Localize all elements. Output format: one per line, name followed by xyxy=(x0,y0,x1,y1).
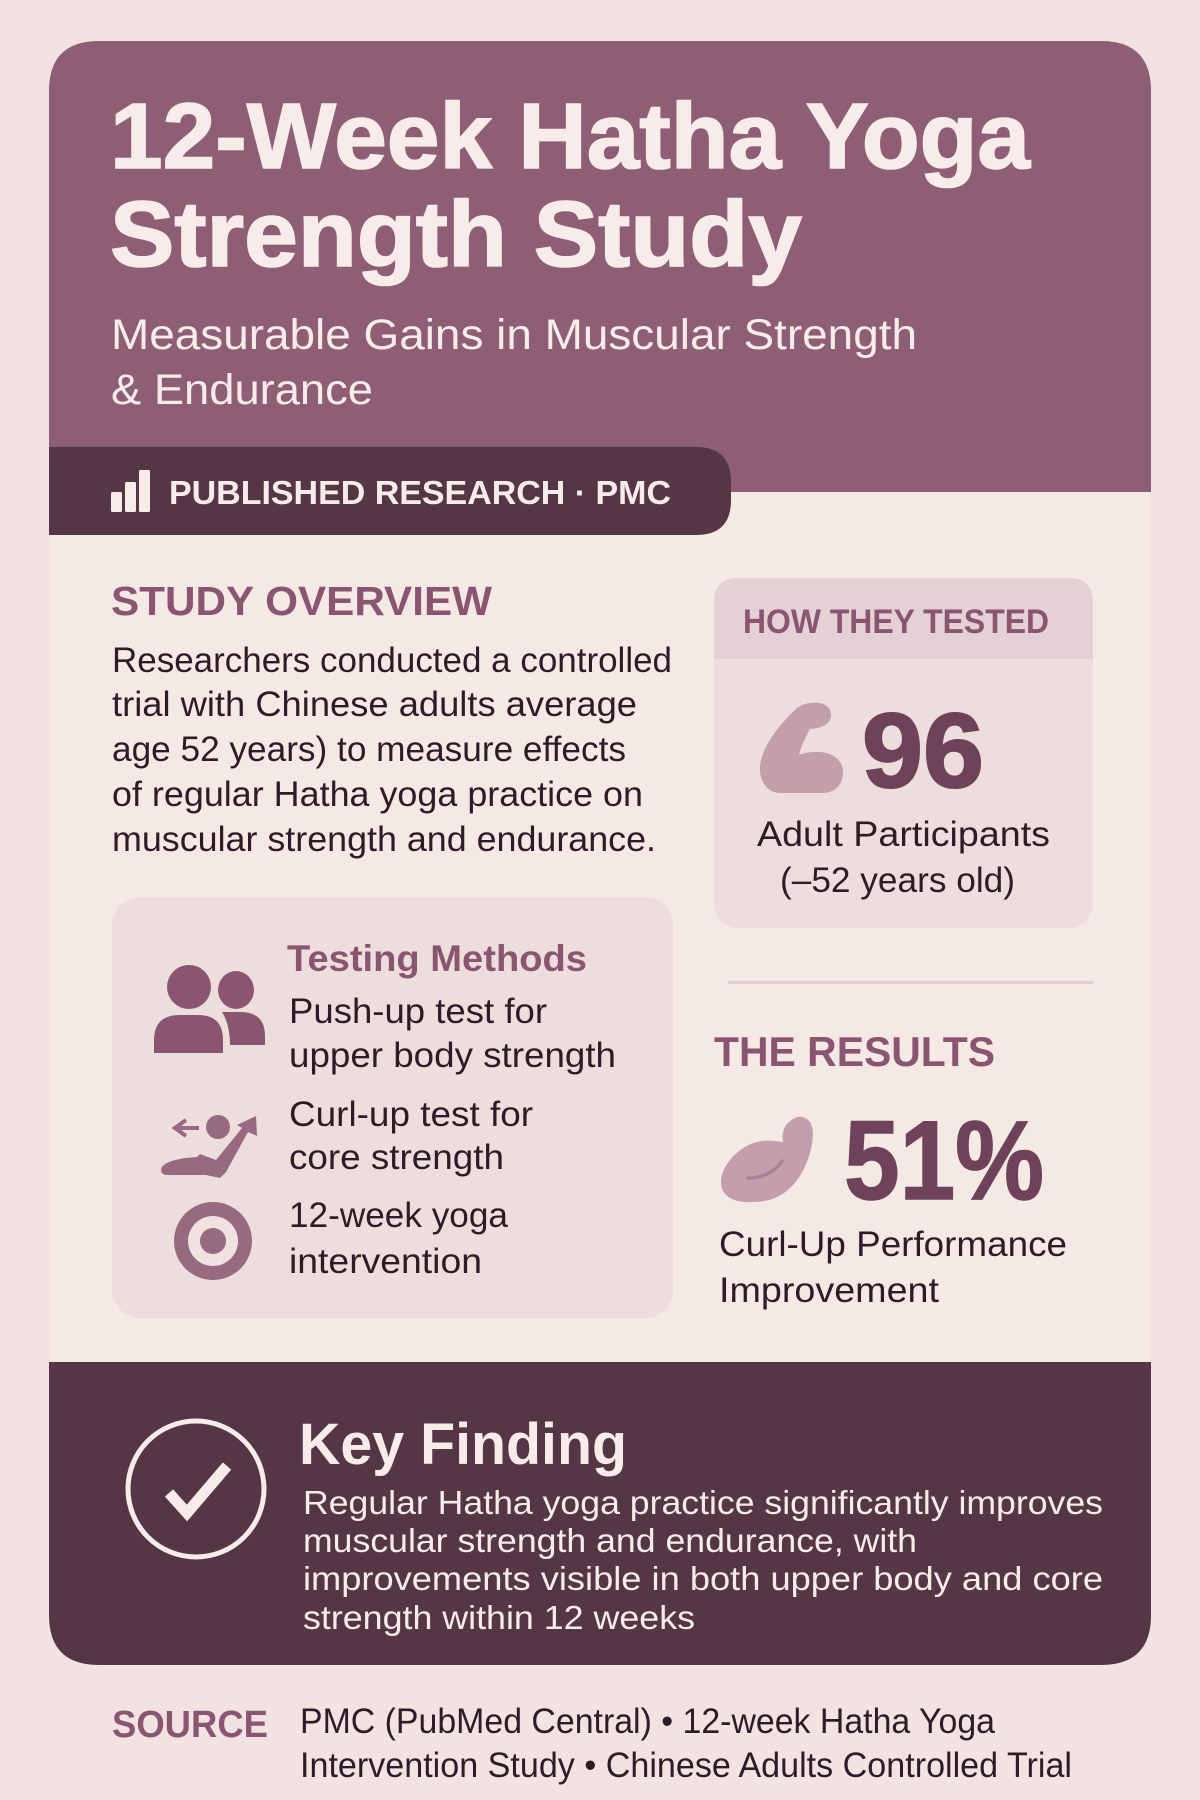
text: curl-up test: Curl-up test for xyxy=(289,1095,533,1134)
icon: curl muscle xyxy=(721,1117,813,1202)
heading: the results: THE RESULTS xyxy=(714,1028,995,1075)
text: key finding paragraph: Regular Hatha yoga practice significantly improves xyxy=(303,1484,1103,1521)
text: key finding paragraph: strength within 12 weeks xyxy=(303,1599,695,1636)
source text: PMC (PubMed Central) • 12-week Hatha Yoga xyxy=(300,1702,996,1741)
source text xyxy=(300,1702,1072,1785)
text: participants label: (–52 years old) xyxy=(780,861,1015,900)
text: key finding paragraph xyxy=(303,1484,1103,1636)
icon: people xyxy=(154,965,265,1053)
text: participants label: Adult Participants xyxy=(757,815,1050,854)
text: overview paragraph xyxy=(112,641,672,859)
text: result label: Improvement xyxy=(719,1271,939,1310)
icon: check circle xyxy=(128,1421,264,1557)
panel: key finding xyxy=(49,1362,1151,1665)
source label: SOURCE xyxy=(112,1704,268,1746)
text: curl-up test xyxy=(289,1095,533,1177)
panel: how they tested xyxy=(714,578,1093,928)
source text: Intervention Study • Chinese Adults Controlled Trial xyxy=(300,1746,1072,1785)
text: yoga intervention: 12-week yoga xyxy=(289,1196,509,1235)
stat: 51 percent: 51% xyxy=(844,1098,1044,1223)
badge: published research xyxy=(49,447,731,535)
heading: how they tested: HOW THEY TESTED xyxy=(743,603,1049,641)
text: overview paragraph: age 52 years) to measure effects xyxy=(112,730,626,769)
text: key finding paragraph: muscular strength and endurance, with xyxy=(303,1522,917,1559)
text: participants label xyxy=(757,815,1050,900)
heading: study overview: STUDY OVERVIEW xyxy=(111,578,492,624)
subtitle xyxy=(111,311,917,414)
panel: testing methods xyxy=(112,897,673,1318)
section: study overview xyxy=(111,578,672,859)
text: yoga intervention: intervention xyxy=(289,1242,482,1281)
text: overview paragraph: trial with Chinese adults average xyxy=(112,685,637,724)
stat: 96 participants: 96 xyxy=(862,692,984,810)
text: overview paragraph: muscular strength and endurance. xyxy=(112,820,656,859)
section: the results xyxy=(714,1028,1067,1310)
text: result label xyxy=(719,1225,1067,1310)
icon: curl-up xyxy=(161,1115,257,1178)
subtitle: & Endurance xyxy=(111,366,373,414)
text: overview paragraph: of regular Hatha yoga practice on xyxy=(112,775,643,814)
text: push-up test xyxy=(289,992,616,1075)
text: push-up test: Push-up test for xyxy=(289,992,547,1031)
title xyxy=(110,84,1031,286)
icon: bar chart xyxy=(111,470,150,512)
heading: testing methods: Testing Methods xyxy=(287,938,587,979)
text: overview paragraph: Researchers conducted a controlled xyxy=(112,641,672,680)
panel: header xyxy=(49,41,1151,492)
icon: flexed arm xyxy=(760,703,843,793)
heading: key finding: Key Finding xyxy=(299,1412,627,1477)
title: Strength Study xyxy=(110,182,802,286)
panel header band xyxy=(714,578,1093,659)
badge label: PUBLISHED RESEARCH · PMC xyxy=(169,474,671,511)
text: key finding paragraph: improvements visible in both upper body and core xyxy=(303,1560,1103,1597)
text: result label: Curl-Up Performance xyxy=(719,1225,1067,1264)
text: push-up test: upper body strength xyxy=(289,1036,616,1075)
title: 12-Week Hatha Yoga xyxy=(110,84,1031,188)
text: yoga intervention xyxy=(289,1196,509,1281)
footer: source xyxy=(112,1702,1072,1785)
panel: main content background xyxy=(49,480,1151,1370)
text: curl-up test: core strength xyxy=(289,1138,504,1177)
subtitle: Measurable Gains in Muscular Strength xyxy=(111,311,917,359)
icon: target xyxy=(174,1202,252,1280)
